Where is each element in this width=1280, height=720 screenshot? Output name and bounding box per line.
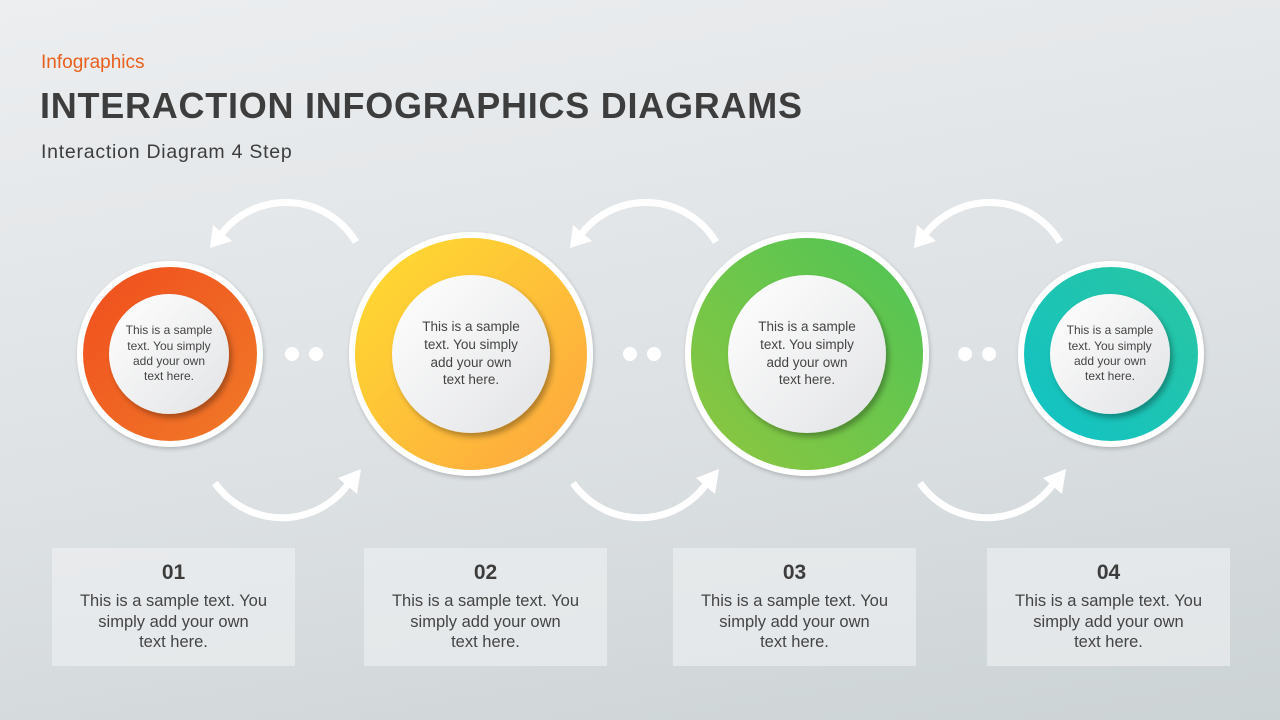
circle 2: This is a sample (422, 319, 520, 334)
box 02 (364, 548, 607, 666)
circle 1: text here. (144, 369, 194, 383)
arrowheads (210, 225, 1066, 494)
circle 1 (77, 261, 263, 447)
box 04 (987, 548, 1230, 666)
circle 4: text here. (1085, 369, 1135, 383)
box 04: 04 (1097, 561, 1120, 584)
circle 3: text. You simply (760, 337, 854, 352)
box 01: 01 (162, 561, 185, 584)
circle 4: text. You simply (1068, 339, 1152, 353)
box 01: text here. (139, 633, 208, 651)
box 03 (673, 548, 916, 666)
circle 2: text here. (443, 372, 499, 387)
subtitle: Interaction Diagram 4 Step (41, 141, 292, 163)
circle 2 (349, 232, 593, 476)
circle 3: This is a sample (758, 319, 856, 334)
box 02: 02 (474, 561, 497, 584)
box 02: text here. (451, 633, 520, 651)
box 01 (52, 548, 295, 666)
box 03: text here. (760, 633, 829, 651)
box 04: text here. (1074, 633, 1143, 651)
circle 1: This is a sample (126, 323, 213, 337)
circle 3 (685, 232, 929, 476)
box 03: simply add your own (719, 612, 870, 630)
circle 3: text here. (779, 372, 835, 387)
box 04: This is a sample text. You (1015, 592, 1202, 610)
box 01: This is a sample text. You (80, 592, 267, 610)
circle 1: add your own (133, 354, 205, 368)
arrows (215, 202, 1060, 518)
circle 2: add your own (430, 355, 512, 370)
circle 2: text. You simply (424, 337, 518, 352)
box 01: simply add your own (98, 612, 249, 630)
label: Infographics: Infographics (41, 52, 145, 73)
box 03: This is a sample text. You (701, 592, 888, 610)
box 03: 03 (783, 561, 806, 584)
circle 4 (1018, 261, 1204, 447)
dots (285, 347, 996, 361)
circle 3: add your own (766, 355, 848, 370)
box 02: simply add your own (410, 612, 561, 630)
circle 1: text. You simply (127, 339, 211, 353)
circle 4: add your own (1074, 354, 1146, 368)
box 04: simply add your own (1033, 612, 1184, 630)
title: INTERACTION INFOGRAPHICS DIAGRAMS (40, 85, 803, 126)
box 02: This is a sample text. You (392, 592, 579, 610)
circle 4: This is a sample (1067, 323, 1154, 337)
